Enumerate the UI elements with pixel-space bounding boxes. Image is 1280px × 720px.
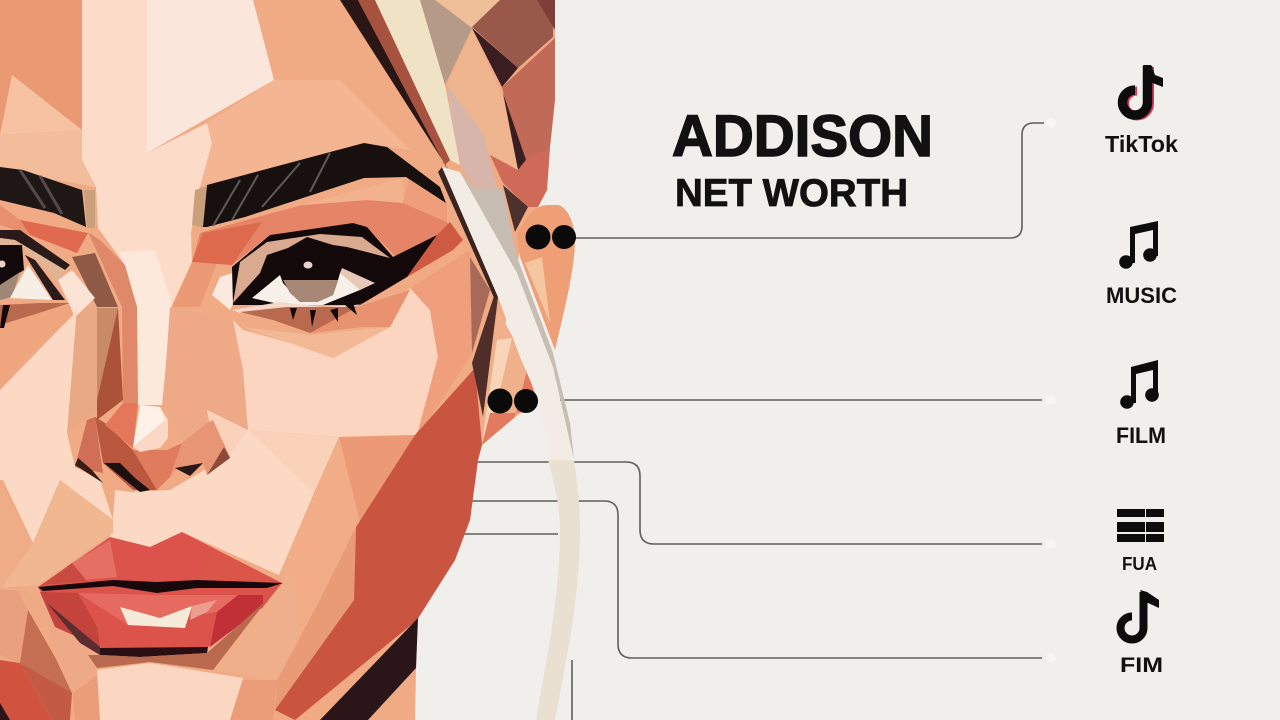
right eye xyxy=(232,223,437,333)
light right cheek xyxy=(233,288,438,437)
title: ADDISON xyxy=(672,104,933,169)
lower ear xyxy=(482,310,538,445)
right eyebrow xyxy=(192,143,446,227)
left cheek xyxy=(0,307,113,543)
chin xyxy=(97,663,243,720)
icon: film note xyxy=(1120,360,1159,409)
mauve panel and dark hair strip xyxy=(470,185,528,417)
connector lines xyxy=(455,123,1044,720)
label: TikTok: TikTok xyxy=(1105,131,1178,157)
upper ear xyxy=(517,205,575,350)
ear studs bottom xyxy=(488,388,538,414)
label: fua: FUA xyxy=(1122,554,1157,574)
lips xyxy=(38,532,283,670)
label: film: FILM xyxy=(1116,423,1166,448)
ear studs top xyxy=(526,224,576,250)
left eyebrow xyxy=(0,167,95,228)
hair strands xyxy=(340,0,580,720)
subtitle: NET WORTH xyxy=(675,172,908,215)
title xyxy=(672,104,933,215)
left eye xyxy=(0,230,70,328)
icon: note ring xyxy=(1120,590,1159,640)
jaw band xyxy=(320,618,418,720)
icon: film bars xyxy=(1117,509,1164,542)
under-brow colour xyxy=(0,173,463,277)
portrait illustration xyxy=(0,0,580,720)
icon: music note xyxy=(1119,221,1158,269)
nose bridge column xyxy=(120,250,172,405)
icon: TikTok xyxy=(1122,65,1163,116)
red cheek shadow xyxy=(275,368,482,720)
label: music: MUSIC xyxy=(1106,283,1177,308)
label: fim: FIM xyxy=(1120,654,1163,677)
forehead facets xyxy=(0,0,410,307)
connector end glows xyxy=(1046,118,1056,663)
face base xyxy=(0,0,555,720)
mid-face facets xyxy=(0,232,472,720)
nose xyxy=(75,403,230,492)
under-mouth and lower-left facets xyxy=(110,430,314,575)
hair panel xyxy=(420,0,555,227)
